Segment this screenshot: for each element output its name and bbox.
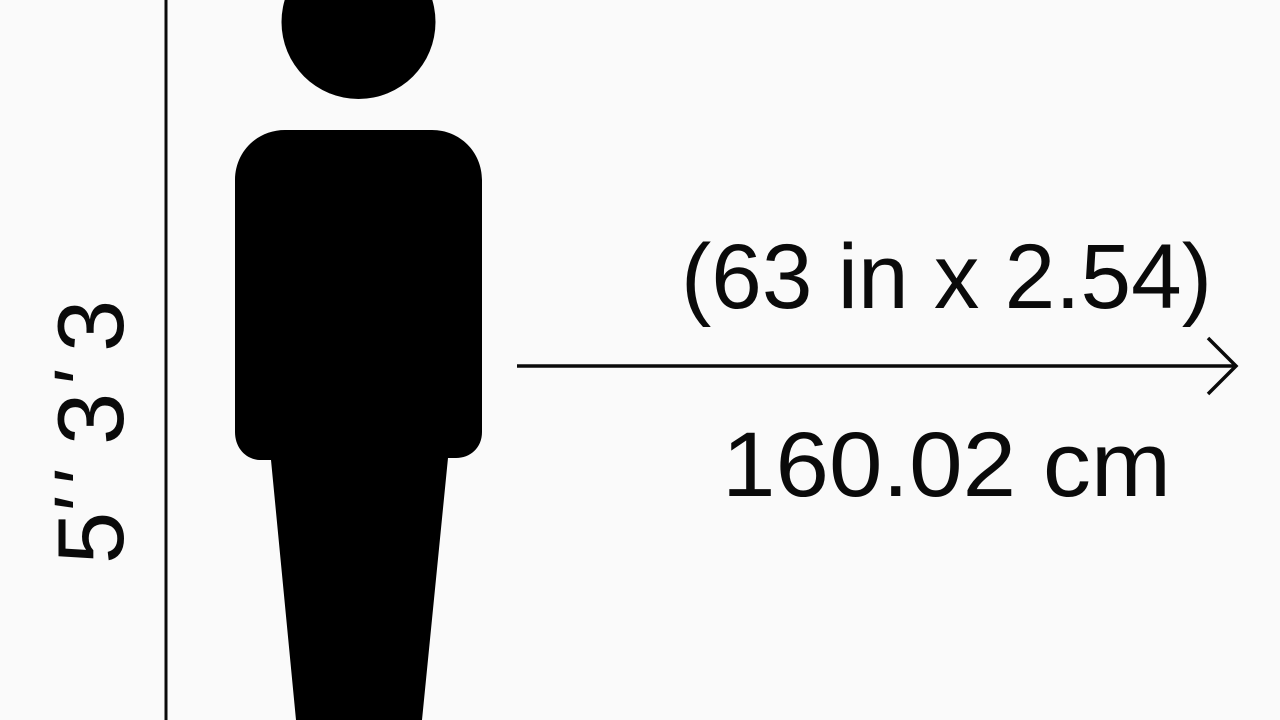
- rotated height label: '': [37, 470, 131, 516]
- rotated height label: 5: [38, 512, 143, 564]
- person head: [282, 0, 436, 99]
- rotated height label: 3: [38, 393, 143, 445]
- formula text: (63 in x 2.54): [681, 226, 1212, 328]
- vertical height line: [164, 0, 168, 720]
- arrow head: [1208, 338, 1236, 394]
- arrow shaft: [517, 364, 1236, 368]
- person torso and legs: [235, 130, 482, 720]
- rotated height label: 3: [38, 300, 143, 352]
- arrow: [517, 338, 1236, 394]
- icon: standing person: [235, 0, 482, 720]
- rotated height label: ': [37, 370, 131, 389]
- result text: 160.02 cm: [722, 414, 1171, 516]
